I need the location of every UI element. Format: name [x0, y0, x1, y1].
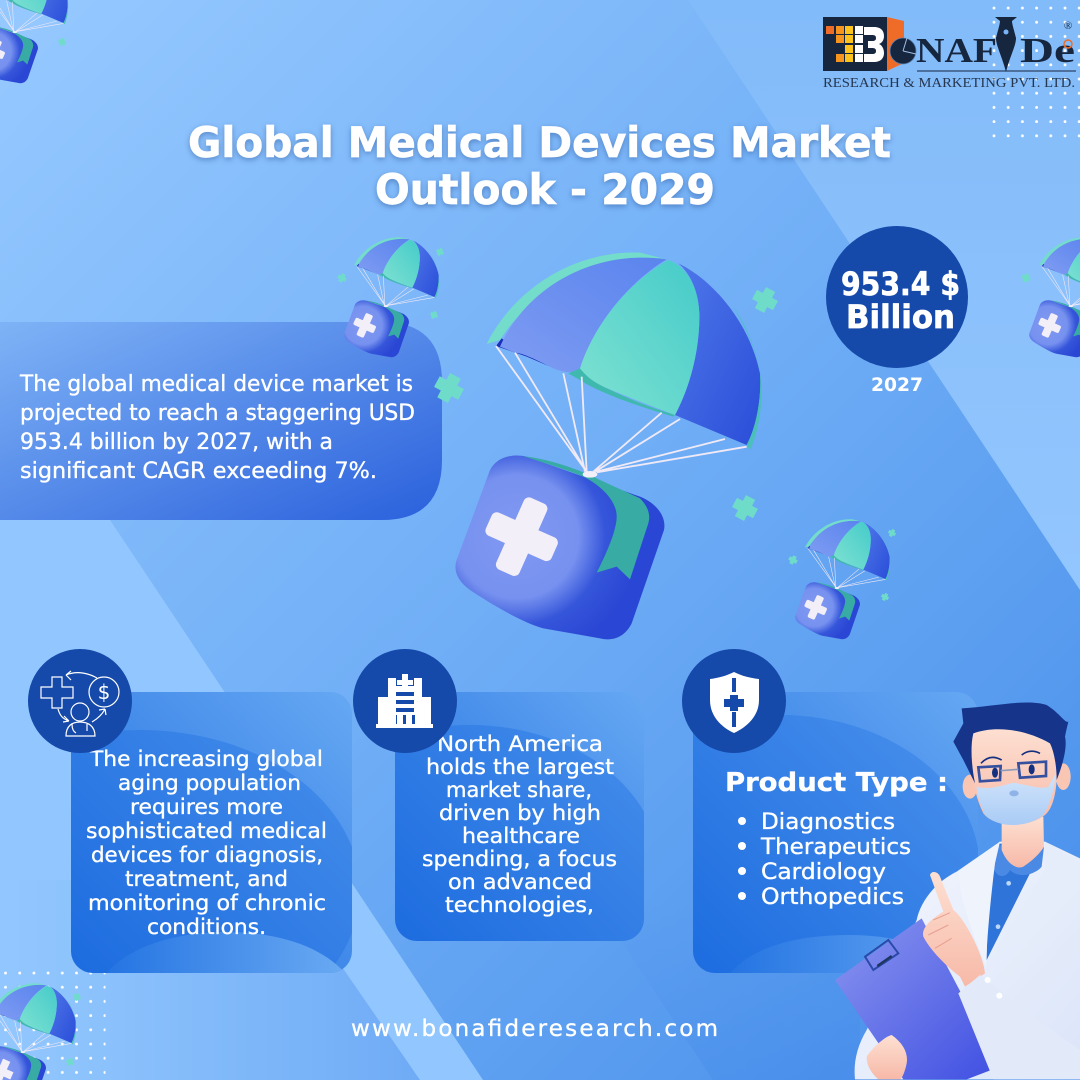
- icon: healthcare cost cycle: [28, 649, 132, 753]
- card: aging population: treatment, and: [125, 867, 288, 891]
- website url: www.bonafideresearch.com: [351, 1016, 718, 1042]
- logo: Bonafide Research & Marketing: RESEARCH & MARKETING PVT. LTD.: [823, 76, 1075, 91]
- card: product type: Therapeutics: [760, 835, 911, 860]
- card: North America: North America: [437, 732, 603, 756]
- card: product type: Orthopedics: [761, 885, 904, 910]
- card: North America: market share,: [446, 778, 592, 802]
- logo: Bonafide Research & Marketing: De: [1020, 31, 1075, 70]
- card: North America: healthcare: [462, 824, 580, 848]
- card: aging population: requires more: [130, 795, 283, 819]
- panel: market projection: 953.4 billion by 2027, with a: [20, 430, 333, 455]
- illustration: small parachute, right edge: [1029, 237, 1080, 357]
- illustration: small parachute, upper middle: [344, 237, 439, 357]
- stat badge: 953.4 $ Billion: [826, 226, 968, 368]
- stat year: 2027: [871, 374, 923, 396]
- icon: medical shield: [682, 649, 786, 753]
- card: aging population: monitoring of chronic: [88, 891, 326, 915]
- logo: Bonafide Research & Marketing: ®: [1064, 20, 1072, 32]
- stat badge: 953.4 $ Billion: Billion: [846, 298, 955, 336]
- card: aging population: devices for diagnosis,: [91, 843, 323, 867]
- panel: market projection: The global medical device market is: [19, 372, 413, 397]
- card: product type: Cardiology: [761, 860, 886, 885]
- card: North America: technologies,: [445, 893, 594, 917]
- panel: market projection: significant CAGR exceeding 7%.: [20, 459, 377, 484]
- illustration: main parachute with medical box: [455, 253, 762, 639]
- icon: healthcare cost cycle: $: [98, 680, 110, 704]
- title: Global Medical Devices Market: [188, 118, 891, 167]
- card: aging population: conditions.: [147, 915, 266, 939]
- title: [188, 118, 891, 214]
- card: aging population: sophisticated medical: [86, 819, 327, 843]
- card: aging population: The increasing global: [89, 747, 323, 771]
- card: aging population: aging population: [118, 771, 301, 795]
- stat badge: 953.4 $ Billion: 953.4 $: [841, 265, 960, 303]
- card: product type: Product Type :: [725, 768, 948, 798]
- card: product type: [693, 692, 978, 973]
- card: North America: on advanced: [448, 870, 592, 894]
- panel: market projection: [0, 322, 442, 520]
- illustration: small parachute, bottom-left corner: [0, 983, 76, 1080]
- card: aging population: [71, 692, 352, 973]
- illustration: small parachute, lower right of main: [795, 519, 890, 639]
- card: North America: driven by high: [439, 801, 601, 825]
- illustration: small parachute, top-left corner: [0, 0, 68, 83]
- icon: hospital building: [353, 649, 457, 753]
- title: Outlook - 2029: [375, 165, 715, 214]
- card: product type: Diagnostics: [761, 810, 895, 835]
- card: North America: [395, 692, 644, 941]
- logo: Bonafide Research & Marketing: NAF: [916, 31, 997, 70]
- logo: Bonafide Research & Marketing: [823, 17, 1076, 91]
- card: North America: spending, a focus: [422, 847, 617, 871]
- panel: market projection: projected to reach a staggering USD: [20, 401, 415, 426]
- card: North America: holds the largest: [426, 755, 614, 779]
- illustration: doctor with clipboard: [835, 702, 1080, 1079]
